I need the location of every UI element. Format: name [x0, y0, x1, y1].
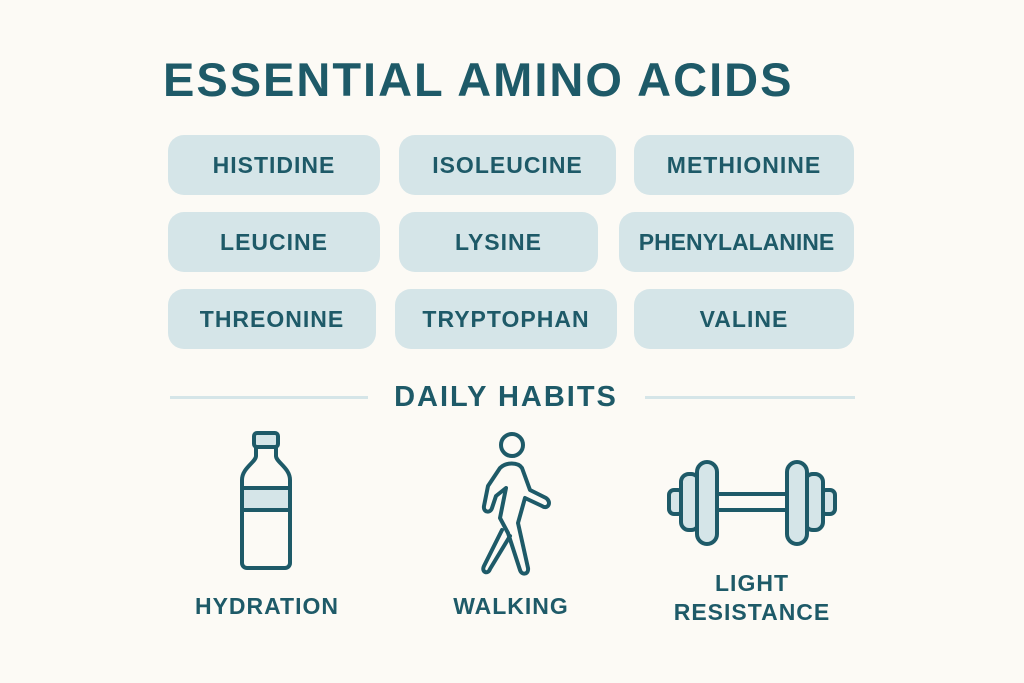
label: hydration: HYDRATION: [195, 593, 339, 619]
title: ESSENTIAL AMINO ACIDS: [163, 53, 793, 106]
pill: phenylalanine: PHENYLALANINE: [639, 228, 834, 254]
pill: leucine: LEUCINE: [220, 228, 328, 254]
pill: isoleucine: [399, 135, 616, 195]
pill: methionine: [634, 135, 854, 195]
label: light resistance: [674, 570, 830, 625]
label: light resistance: LIGHT: [715, 570, 789, 596]
pill: leucine: [168, 212, 380, 272]
pill: lysine: LYSINE: [455, 228, 542, 254]
pill: lysine: [399, 212, 598, 272]
pill: tryptophan: [395, 289, 617, 349]
pill: isoleucine: ISOLEUCINE: [432, 152, 583, 178]
heading: daily habits: DAILY HABITS: [394, 381, 618, 413]
pill: phenylalanine: [619, 212, 854, 272]
label: walking: WALKING: [453, 593, 569, 619]
label: light resistance: RESISTANCE: [674, 599, 830, 625]
pill: valine: [634, 289, 854, 349]
pill: threonine: THREONINE: [200, 306, 344, 332]
pill: valine: VALINE: [700, 306, 788, 332]
pill: histidine: HISTIDINE: [213, 152, 335, 178]
pill: methionine: METHIONINE: [667, 152, 821, 178]
icon: bottle: [240, 431, 292, 570]
pill: tryptophan: TRYPTOPHAN: [422, 306, 590, 332]
pill: histidine: [168, 135, 380, 195]
pill: threonine: [168, 289, 376, 349]
icon: dumbbell: [667, 460, 837, 546]
icon: walking person: [481, 432, 551, 576]
